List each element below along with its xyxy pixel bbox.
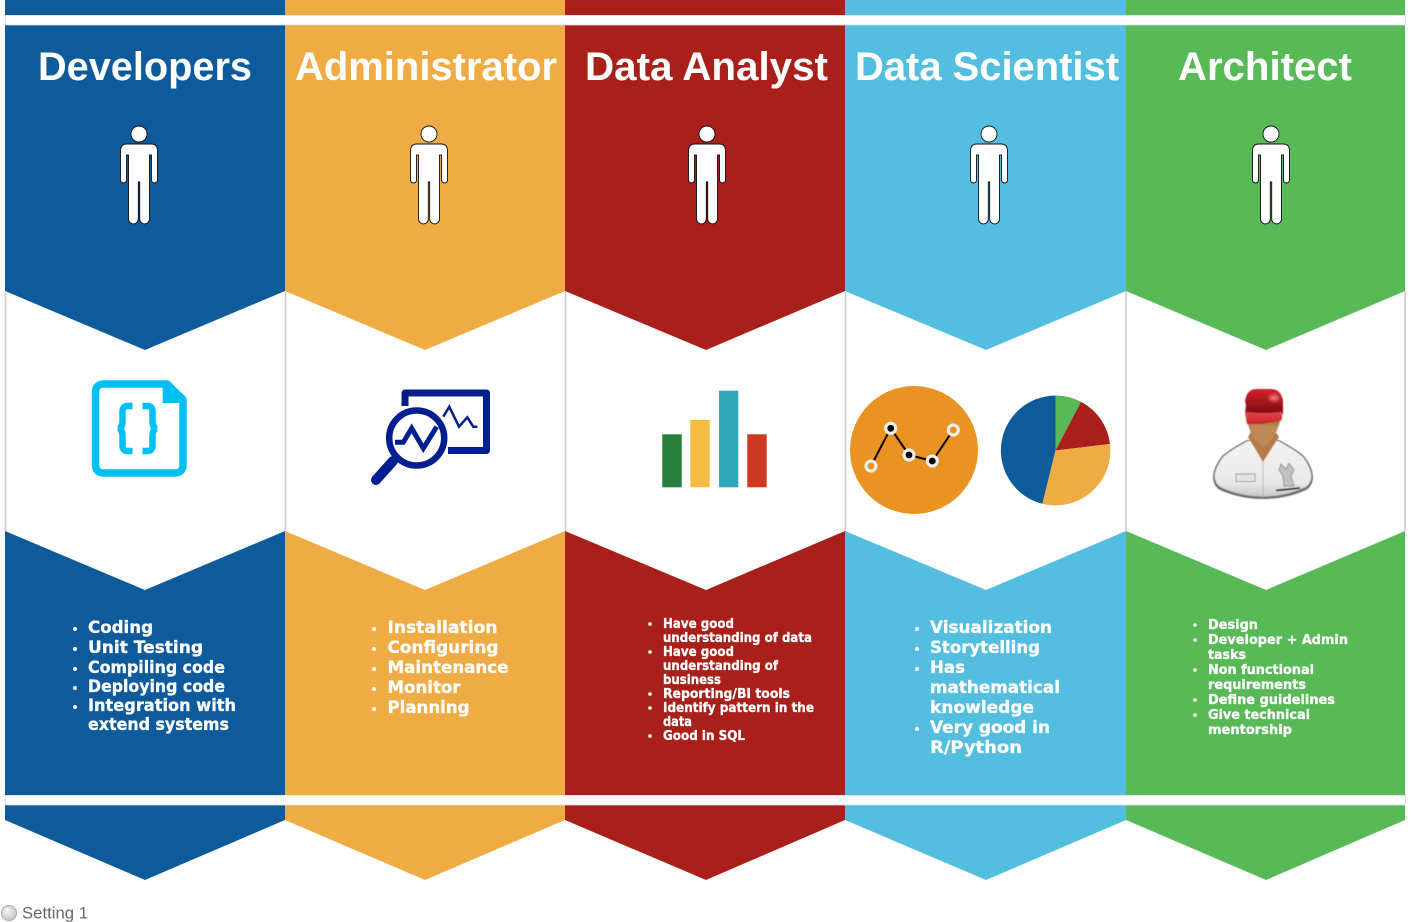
list: architect: mentorship xyxy=(1208,723,1292,738)
list: architect: Developer + Admin xyxy=(1208,633,1348,648)
list: architect: requirements xyxy=(1208,678,1306,693)
list: architect xyxy=(1193,618,1348,738)
list: data scientist: Very good in xyxy=(930,718,1050,738)
top band: architect xyxy=(1126,0,1405,15)
bottom band: data analyst xyxy=(565,805,845,880)
list: architect: tasks xyxy=(1208,648,1246,663)
bottom band: data scientist xyxy=(845,805,1126,880)
list: administrator: Planning xyxy=(388,698,470,718)
top band: data scientist xyxy=(845,0,1126,15)
list: data analyst: Good in SQL xyxy=(663,729,745,744)
bottom band: developers xyxy=(5,805,285,880)
list: data analyst: understanding of xyxy=(663,659,778,674)
header chevron: developers xyxy=(5,25,285,350)
header chevron: data analyst xyxy=(565,25,845,350)
list: data analyst: Identify pattern in the xyxy=(663,701,814,716)
icon: person xyxy=(120,126,158,224)
heading: data analyst: Data Analyst xyxy=(585,45,828,89)
content chevron: data analyst xyxy=(565,531,845,795)
list: data scientist: Has xyxy=(930,658,965,678)
header chevron: architect xyxy=(1126,25,1405,350)
list: data analyst xyxy=(648,617,814,744)
top band: data analyst xyxy=(565,0,845,15)
panel: data analyst xyxy=(565,0,845,880)
list: administrator: Monitor xyxy=(388,678,461,698)
list: developers xyxy=(73,618,236,735)
list: administrator: Installation xyxy=(388,618,498,638)
list: data scientist xyxy=(915,618,1060,758)
list: data analyst: Have good xyxy=(663,617,734,632)
list: developers: extend systems xyxy=(88,715,229,735)
top band: developers xyxy=(5,0,285,15)
list: developers: Deploying code xyxy=(88,677,225,697)
icon: worker with red cap xyxy=(1213,389,1313,499)
icon: line chart badge xyxy=(850,386,978,514)
list: administrator: Configuring xyxy=(388,638,498,658)
bottom band: administrator xyxy=(285,805,565,880)
panel: administrator xyxy=(285,0,565,880)
list: data scientist: R/Python xyxy=(930,738,1022,758)
content chevron: architect xyxy=(1126,531,1405,795)
panel: data scientist xyxy=(845,0,1126,880)
list: architect: Define guidelines xyxy=(1208,693,1335,708)
list: data analyst: Reporting/BI tools xyxy=(663,687,790,702)
list: data analyst: data xyxy=(663,715,692,730)
panel: developers xyxy=(5,0,285,880)
icon: person xyxy=(688,126,726,224)
list: developers: Integration with xyxy=(88,696,236,716)
icon: person xyxy=(970,126,1008,224)
radio option: setting 1: Setting 1 xyxy=(22,904,88,922)
list: data scientist: mathematical xyxy=(930,678,1060,698)
list: developers: Compiling code xyxy=(88,658,225,678)
list: developers: Coding xyxy=(88,618,153,638)
heading: architect: Architect xyxy=(1178,45,1352,89)
list: data analyst: Have good xyxy=(663,645,734,660)
content chevron: data scientist xyxy=(845,531,1126,795)
list: data scientist: Storytelling xyxy=(930,638,1040,658)
list: administrator xyxy=(372,618,508,718)
content chevron: developers xyxy=(5,531,285,795)
list: architect: Give technical xyxy=(1208,708,1310,723)
icon: person xyxy=(410,126,448,224)
list: data scientist: knowledge xyxy=(930,698,1034,718)
icon: magnifier over chart xyxy=(376,393,486,480)
header chevron: administrator xyxy=(285,25,565,350)
list: developers: Unit Testing xyxy=(88,638,203,658)
panel: architect xyxy=(1126,0,1405,880)
list: architect: Non functional xyxy=(1208,663,1314,678)
list: architect: Design xyxy=(1208,618,1258,633)
top band: administrator xyxy=(285,0,565,15)
list: administrator: Maintenance xyxy=(388,658,508,678)
icon: bar chart xyxy=(662,391,767,487)
list: data analyst: business xyxy=(663,673,721,688)
icon: code file xyxy=(96,384,183,473)
list: data analyst: understanding of data xyxy=(663,631,812,646)
heading: administrator: Administrator xyxy=(295,45,557,89)
list: data scientist: Visualization xyxy=(930,618,1052,638)
icon: pie chart xyxy=(1001,395,1110,505)
bottom band: architect xyxy=(1126,805,1405,880)
heading: data scientist: Data Scientist xyxy=(855,45,1119,89)
heading: developers: Developers xyxy=(38,45,252,89)
header chevron: data scientist xyxy=(845,25,1126,350)
icon: person xyxy=(1252,126,1290,224)
content chevron: administrator xyxy=(285,531,565,795)
